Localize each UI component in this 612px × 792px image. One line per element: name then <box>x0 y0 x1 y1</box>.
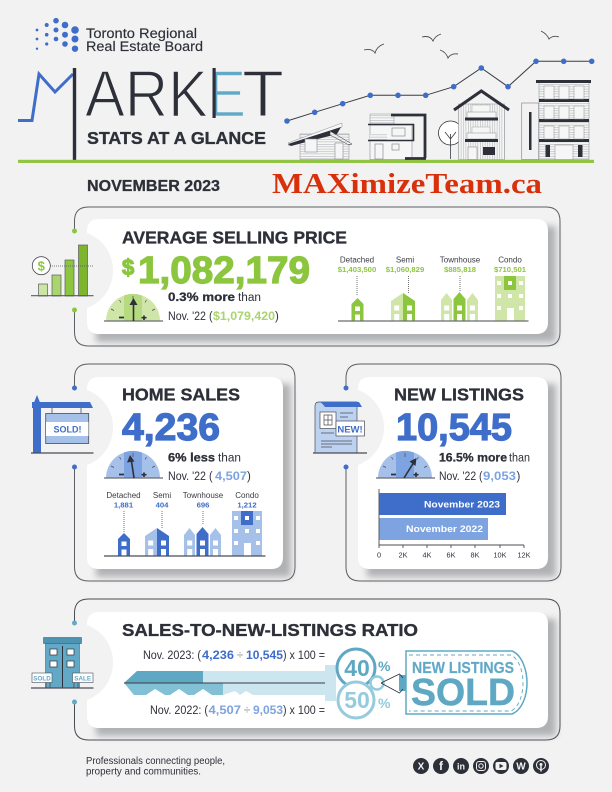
panel frame <box>74 364 295 581</box>
change text: Nov. '22 ( <box>168 311 213 323</box>
formula: November 2022: ÷ <box>244 705 250 717</box>
formula: November 2022: 9,053 <box>253 705 283 717</box>
card <box>87 612 548 728</box>
icon: new listing document <box>313 402 367 453</box>
card shadow <box>367 384 556 577</box>
icon: bar chart with dollar <box>31 245 94 296</box>
heading: AVERAGE SELLING PRICE <box>122 228 347 248</box>
axis labels: 12K <box>518 550 531 560</box>
tag: new listings sold <box>406 651 527 714</box>
formula: November 2022 <box>150 705 325 717</box>
card shadow <box>96 619 556 736</box>
social media icons: W <box>516 762 526 772</box>
formula: November 2023: 4,236 <box>202 650 234 662</box>
panel: home sales <box>31 364 295 581</box>
axis labels: 6K <box>447 550 456 560</box>
line chart <box>284 58 594 124</box>
housing type breakdown: Semi <box>153 491 171 500</box>
card <box>358 377 548 569</box>
axis labels: 0 <box>377 550 381 560</box>
house 3 <box>454 91 509 160</box>
big number: $ <box>122 255 134 280</box>
change text: ) <box>275 311 279 323</box>
small ring and tag string <box>370 674 406 693</box>
social media icons: f <box>439 759 444 773</box>
house 2 <box>368 114 426 160</box>
tree <box>438 121 462 159</box>
tag: new listings sold: SOLD <box>411 672 515 714</box>
connector dots <box>344 386 348 470</box>
change text: Nov. '22 ( <box>439 471 483 483</box>
icon: condo building with signs: SALE <box>74 676 91 682</box>
axis labels: 8K <box>471 550 480 560</box>
title letter T: T <box>242 57 284 131</box>
formula: November 2023 <box>143 650 325 662</box>
formula: November 2023: 10,545 <box>246 650 284 662</box>
big number: 4,236 <box>122 407 220 449</box>
big number: 10,545 <box>396 407 512 449</box>
card <box>87 377 283 569</box>
icon: condo building with signs: SOLD <box>33 676 51 682</box>
icon: key <box>124 665 336 701</box>
logo: Toronto Regional Real Estate Board <box>36 18 203 54</box>
change text: 4,507 <box>215 471 247 483</box>
card shadow <box>96 384 291 577</box>
title letters ARK: ARK <box>85 57 208 131</box>
housing type breakdown <box>104 491 266 556</box>
panel: average selling price <box>31 207 560 346</box>
connector dots <box>72 228 77 312</box>
date: NOVEMBER 2023 <box>87 178 220 195</box>
gauge <box>104 294 163 321</box>
housing type breakdown: Detached <box>106 491 141 500</box>
house 1 <box>288 123 352 160</box>
formula: November 2023: ÷ <box>237 650 243 662</box>
housing type breakdown: $710,501 <box>494 265 527 274</box>
bar: November 2023 <box>380 493 506 515</box>
connector dots <box>72 620 77 704</box>
housing type breakdown: 1,212 <box>237 500 257 510</box>
key ring: 2023 ratio: 40 <box>344 655 370 681</box>
panel: new listings <box>313 364 561 581</box>
bar labels: November 2023 <box>424 500 500 510</box>
gauge <box>376 451 435 478</box>
heading: NEW LISTINGS <box>394 385 524 405</box>
title: MARKET <box>18 57 284 162</box>
logo wordmark: Real Estate Board <box>86 39 203 54</box>
key ring: 2022 ratio <box>338 682 391 718</box>
social media icons: X <box>418 762 425 772</box>
housing type breakdown: Condo <box>235 491 259 500</box>
gauge <box>104 451 163 478</box>
title letter E: E <box>208 57 246 131</box>
bar labels: November 2022 <box>406 524 483 535</box>
E stem <box>212 68 216 118</box>
change text: than <box>218 453 241 465</box>
change text: than <box>509 453 530 465</box>
housing type breakdown: 1,881 <box>114 500 134 510</box>
change text <box>168 451 251 483</box>
icon: blue line forming the M <box>18 74 73 120</box>
housing type breakdown: Condo <box>498 256 522 264</box>
change text: 16.5% more <box>439 451 507 465</box>
housing type breakdown: $885,818 <box>444 265 477 274</box>
big number: 1,082,179 <box>138 250 310 292</box>
icon: logo dots <box>36 18 79 52</box>
axis labels: 2K <box>399 550 408 560</box>
key ring: 2022 ratio: 50 <box>344 687 370 713</box>
change text: 6% less <box>168 451 215 465</box>
change text <box>439 451 530 483</box>
tag: new listings sold: NEW LISTINGS <box>412 660 514 677</box>
panel frame <box>74 599 560 740</box>
icon: new listing document: NEW! <box>337 424 363 436</box>
heading: SALES-TO-NEW-LISTINGS RATIO <box>122 620 418 640</box>
key ring: 2023 ratio: % <box>378 658 391 674</box>
birds <box>364 31 559 58</box>
key ring: 2023 ratio <box>337 649 391 687</box>
change text: 9,053 <box>483 471 516 483</box>
footer tagline: Professionals connecting people, <box>86 756 225 767</box>
bar chart <box>377 489 531 560</box>
footer tagline: property and communities. <box>86 766 201 778</box>
M stem <box>73 68 76 162</box>
bar: November 2022 <box>380 518 488 540</box>
housing type breakdown: $1,060,829 <box>386 265 424 274</box>
housing type breakdown: Detached <box>340 256 374 264</box>
change text <box>168 290 279 323</box>
housing type breakdown: $1,403,500 <box>338 265 376 274</box>
formula: November 2022: ) x 100 = <box>283 705 325 717</box>
key ring: 2022 ratio: % <box>378 695 391 711</box>
housing type breakdown <box>338 256 528 321</box>
formula: November 2022: Nov. 2022: ( <box>150 705 208 717</box>
axis labels: 4K <box>423 550 432 560</box>
social media icons <box>413 758 549 774</box>
icon: condo building with signs <box>31 638 94 688</box>
icon: bar chart with dollar: $ <box>38 258 46 274</box>
change text: $1,079,420 <box>213 311 275 323</box>
green ground line <box>18 160 594 163</box>
housing type breakdown: Townhouse <box>440 256 481 264</box>
axes <box>379 489 524 548</box>
axis labels <box>377 550 531 560</box>
heading: HOME SALES <box>122 385 240 405</box>
bar labels <box>406 500 500 535</box>
icon: sold sign <box>31 395 94 453</box>
card shadow <box>96 226 556 342</box>
housing type breakdown: 696 <box>197 500 209 510</box>
change text: than <box>238 292 261 304</box>
connector dots <box>72 386 77 470</box>
apartment building <box>522 80 591 160</box>
housing type breakdown: 404 <box>156 500 169 510</box>
formula: November 2022: 4,507 <box>208 705 241 717</box>
panel frame <box>346 364 561 581</box>
axis labels: 10K <box>494 550 507 560</box>
logo wordmark: Toronto Regional <box>86 26 197 41</box>
formula: November 2023: ) x 100 = <box>283 650 325 662</box>
housing type breakdown: Townhouse <box>183 491 224 500</box>
social media icons: in <box>457 762 465 772</box>
change text: ) <box>516 471 520 483</box>
card <box>87 219 548 334</box>
housing type breakdown: Semi <box>396 256 414 264</box>
change text: Nov. '22 ( <box>168 471 213 483</box>
panel frame <box>74 207 560 346</box>
formula: November 2023: Nov. 2023: ( <box>143 650 201 662</box>
watermark: MAXimizeTeam.ca: MAXimizeTeam.ca <box>272 168 543 200</box>
change text: ) <box>247 471 251 483</box>
subtitle: STATS AT A GLANCE <box>87 128 266 148</box>
panel: sales-to-new-listings ratio <box>31 599 560 740</box>
icon: sold sign: SOLD! <box>54 424 82 434</box>
change text: 0.3% more <box>168 290 235 304</box>
